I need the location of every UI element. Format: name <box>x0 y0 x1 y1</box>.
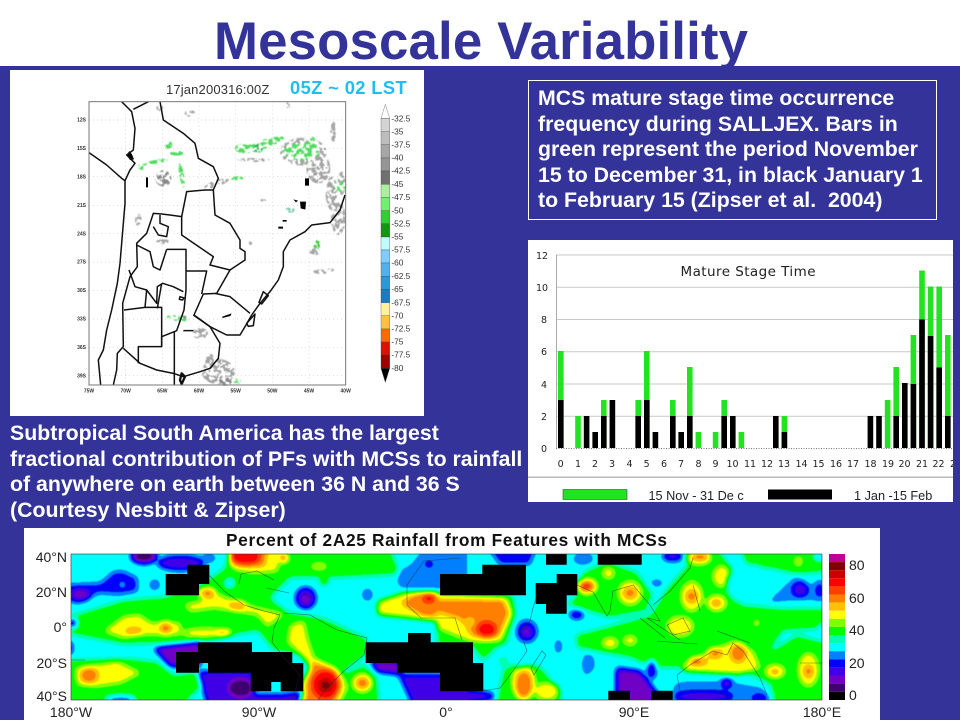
x axis labels: 19 <box>882 459 894 470</box>
colour bar labels: -55 <box>391 232 404 242</box>
chart gridlines <box>556 255 953 448</box>
x axis labels: 1 <box>575 459 581 470</box>
latitude labels: 24S <box>77 231 87 237</box>
colour bar labels: 0 <box>849 687 857 703</box>
y axis labels <box>536 251 548 455</box>
longitude labels: 180°E <box>803 704 841 720</box>
longitude labels: 45W <box>304 388 314 394</box>
latitude labels: 12S <box>77 118 87 124</box>
text block: MCS mature stage description: MCS mature stage time occurrence <box>538 86 894 110</box>
colour bar labels: -35 <box>391 126 404 136</box>
panel: satellite map of South America <box>10 70 424 416</box>
text block: MCS mature stage description: green represent the period November <box>538 137 918 161</box>
y axis labels: 0 <box>541 444 547 455</box>
x axis labels: 17 <box>847 459 859 470</box>
divider above legend <box>528 476 953 478</box>
latitude labels: 15S <box>77 146 87 152</box>
colour bar labels: -77.5 <box>391 350 411 360</box>
black bars <box>558 320 951 448</box>
longitude labels: 90°W <box>242 704 277 720</box>
title: Mesoscale Variability <box>214 12 749 71</box>
x axis labels: 21 <box>916 459 928 470</box>
text block: subtropical South America statement: fractional contribution of PFs with MCSs to rainfall <box>10 447 522 471</box>
text block: subtropical South America statement: of anywhere on earth between 36 N and 36 S <box>10 472 460 496</box>
longitude labels: 90°E <box>619 704 649 720</box>
colour bar labels: -57.5 <box>391 245 411 255</box>
longitude labels: 40W <box>341 388 351 394</box>
text block: MCS mature stage description: 15 to December 31, in black January 1 <box>538 162 923 186</box>
latitude labels: 33S <box>77 317 87 323</box>
map grid <box>89 102 346 385</box>
latitude labels: 0° <box>54 619 67 635</box>
map timestamp: 17jan200316:00Z <box>166 82 269 97</box>
colour bar labels: 40 <box>849 622 865 638</box>
longitude labels: 0° <box>439 704 453 720</box>
longitude labels: 55W <box>231 388 241 394</box>
text block: subtropical South America statement <box>10 421 522 522</box>
latitude labels: 40°S <box>36 688 67 704</box>
latitude labels: 20°N <box>36 584 67 600</box>
colour bar labels: -37.5 <box>391 140 411 150</box>
colour bar labels: -47.5 <box>391 192 411 202</box>
latitude labels <box>36 549 67 704</box>
latitude labels: 18S <box>77 174 87 180</box>
x axis labels: 6 <box>661 459 667 470</box>
text block: MCS mature stage description <box>528 80 937 220</box>
y axis labels: 8 <box>541 315 547 326</box>
black cold cloud tops <box>127 151 309 318</box>
latitude labels: 20°S <box>36 655 67 671</box>
colour bar labels: -70 <box>391 310 404 320</box>
colour bar labels: -50 <box>391 205 404 215</box>
x axis labels: 7 <box>678 459 684 470</box>
western hemisphere field <box>71 554 472 700</box>
map frame <box>89 102 346 385</box>
colour bar labels: -65 <box>391 284 404 294</box>
latitude labels: 36S <box>77 345 87 351</box>
colour bar labels: -52.5 <box>391 218 411 228</box>
map heading: Percent of 2A25 Rainfall from Features with MCSs <box>226 530 667 550</box>
x axis labels: 12 <box>761 459 773 470</box>
colour bar labels: -75 <box>391 337 404 347</box>
latitude labels <box>77 118 87 379</box>
colour bar labels: -62.5 <box>391 271 411 281</box>
x axis labels: 10 <box>726 459 739 470</box>
x axis <box>556 448 953 450</box>
longitude labels: 65W <box>157 388 168 394</box>
latitude labels: 30S <box>77 288 87 294</box>
x axis labels: 18 <box>864 459 877 470</box>
colour bar labels <box>849 557 865 703</box>
text block: MCS mature stage description: to February 15 (Zipser et al. 2004) <box>538 188 882 212</box>
percent colour bar <box>829 554 845 700</box>
y axis labels: 6 <box>541 347 547 358</box>
x axis labels: 4 <box>626 459 633 470</box>
x axis labels: 9 <box>712 459 719 470</box>
text block: MCS mature stage description: frequency during SALLJEX. Bars in <box>538 112 898 136</box>
colour bar labels: -40 <box>391 153 404 163</box>
colour bar labels <box>391 113 411 373</box>
map outlines <box>89 102 345 385</box>
temperature colour bar <box>381 104 390 382</box>
x axis labels: 13 <box>778 459 790 470</box>
rain patches <box>135 102 346 386</box>
x axis labels: 11 <box>744 459 756 470</box>
y axis labels: 12 <box>536 251 548 262</box>
x axis labels: 22 <box>932 459 945 470</box>
colour bar labels: -72.5 <box>391 324 411 334</box>
y axis labels: 2 <box>541 412 547 423</box>
text block: subtropical South America statement: Subtropical South America has the largest <box>10 421 439 445</box>
x axis labels: 2 <box>592 459 598 470</box>
x axis labels: 0 <box>558 459 564 470</box>
text block: subtropical South America statement: (Courtesy Nesbitt & Zipser) <box>10 498 286 522</box>
x axis labels: 16 <box>830 459 842 470</box>
colour bar labels: -32.5 <box>391 113 411 123</box>
longitude labels: 50W <box>267 388 278 394</box>
colour bar labels: 60 <box>849 590 865 606</box>
x axis labels: 3 <box>609 459 615 470</box>
x axis labels: 14 <box>795 459 808 470</box>
colour bar labels: -60 <box>391 258 404 268</box>
latitude labels: 21S <box>77 203 87 209</box>
title <box>0 0 960 66</box>
chart title: Mature Stage Time <box>680 264 816 280</box>
x axis labels <box>558 459 960 470</box>
colour bar labels: -42.5 <box>391 166 411 176</box>
colour bar labels: -45 <box>391 179 404 189</box>
panel: mature stage time bar chart <box>528 240 953 502</box>
panel: global rainfall percentage map <box>24 528 880 720</box>
time label: 05Z ~ 02 LST <box>290 77 407 98</box>
colour bar labels: -67.5 <box>391 297 411 307</box>
map frame <box>71 554 822 700</box>
latitude labels: 39S <box>77 373 87 379</box>
x axis labels: 15 <box>812 459 825 470</box>
longitude labels <box>84 388 351 394</box>
x axis labels: 5 <box>644 459 650 470</box>
eastern hemisphere field <box>430 554 822 700</box>
latitude labels: 40°N <box>36 549 67 565</box>
coastlines <box>71 558 822 700</box>
rainfall contour field <box>71 554 822 700</box>
x axis labels: 20 <box>898 459 911 470</box>
longitude labels: 75W <box>84 388 94 394</box>
latitude labels: 27S <box>77 260 87 266</box>
y axis labels: 4 <box>541 380 547 391</box>
colour bar labels: 20 <box>849 655 865 671</box>
green bars <box>558 270 951 448</box>
colour bar labels: -80 <box>391 363 404 373</box>
longitude labels: 180°W <box>50 704 93 720</box>
legend <box>563 489 932 503</box>
no-data blocks <box>166 554 673 700</box>
longitude labels <box>50 704 841 720</box>
longitude labels: 60W <box>194 388 204 394</box>
y axis labels: 10 <box>536 283 548 294</box>
colour bar labels: 80 <box>849 557 865 573</box>
longitude labels: 70W <box>121 388 131 394</box>
x axis labels: 8 <box>695 459 702 470</box>
